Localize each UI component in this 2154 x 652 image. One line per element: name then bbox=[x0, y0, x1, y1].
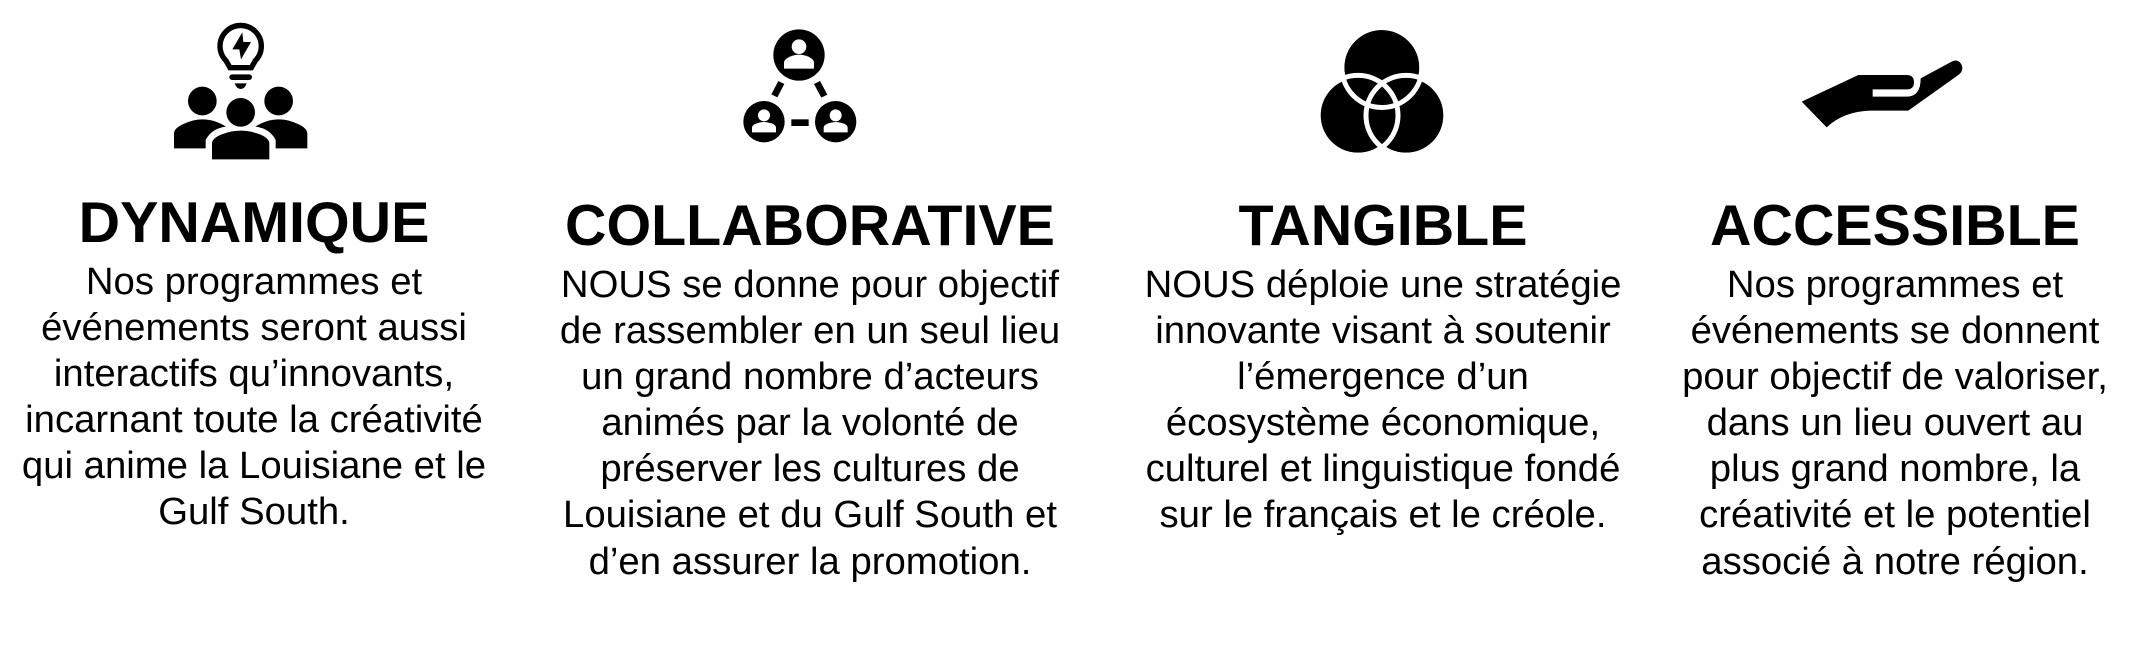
column: Accessible bbox=[1682, 194, 2108, 583]
text: Collaborative description: de rassembler en un seul lieu bbox=[560, 309, 1060, 352]
heading: Accessible: ACCESSIBLE bbox=[1710, 194, 2080, 258]
text: Dynamique description: qui anime la Louisiane et le bbox=[22, 444, 486, 487]
text: Collaborative description bbox=[560, 263, 1060, 583]
text: Dynamique description: événements seront aussi bbox=[41, 306, 467, 349]
text: Dynamique description: incarnant toute la créativité bbox=[25, 398, 483, 441]
text: Tangible description: culturel et linguistique fondé bbox=[1146, 447, 1620, 490]
text: Accessible description: dans un lieu ouvert au bbox=[1707, 401, 2083, 444]
text: Tangible description: NOUS déploie une stratégie bbox=[1145, 263, 1621, 306]
text: Collaborative description: d’en assurer la promotion. bbox=[589, 540, 1031, 583]
text: Tangible description: écosystème économique, bbox=[1166, 401, 1600, 444]
text: Tangible description: sur le français et le créole. bbox=[1160, 493, 1606, 536]
text: Accessible description: créativité et le potentiel bbox=[1699, 493, 2091, 536]
text: Collaborative description: NOUS se donne pour objectif bbox=[561, 263, 1059, 306]
column: Tangible bbox=[1145, 194, 1621, 536]
text: Dynamique description: Nos programmes et bbox=[86, 260, 422, 303]
text: Dynamique description: Gulf South. bbox=[158, 490, 350, 533]
text: Dynamique description bbox=[22, 260, 486, 533]
text: Collaborative description: Louisiane et du Gulf South et bbox=[563, 493, 1057, 536]
heading: Dynamique: DYNAMIQUE bbox=[79, 191, 429, 255]
text: Accessible description: pour objectif de valoriser, bbox=[1682, 355, 2108, 398]
icon: light bulb above three people bbox=[174, 25, 307, 159]
column: Dynamique bbox=[22, 191, 486, 533]
text: Collaborative description: préserver les cultures de bbox=[600, 447, 1020, 490]
text: Accessible description bbox=[1682, 263, 2108, 583]
text: Accessible description: événements se donnent bbox=[1691, 309, 2099, 352]
text: Accessible description: Nos programmes et bbox=[1727, 263, 2063, 306]
icon: open hand bbox=[1802, 61, 1962, 127]
text: Tangible description: innovante visant à soutenir bbox=[1155, 309, 1611, 352]
text: Tangible description: l’émergence d’un bbox=[1237, 355, 1529, 398]
text: Collaborative description: un grand nombre d’acteurs bbox=[581, 355, 1039, 398]
text: Collaborative description: animés par la volonté de bbox=[601, 401, 1019, 444]
column: Collaborative bbox=[560, 194, 1060, 583]
heading: Tangible: TANGIBLE bbox=[1238, 194, 1528, 258]
icon: venn diagram bbox=[1318, 27, 1446, 155]
heading: Collaborative: COLLABORATIVE bbox=[565, 194, 1055, 258]
icon: three connected people bbox=[743, 29, 856, 142]
text: Tangible description bbox=[1145, 263, 1621, 536]
text: Dynamique description: interactifs qu’innovants, bbox=[54, 352, 454, 395]
text: Accessible description: associé à notre région. bbox=[1701, 540, 2089, 583]
text: Accessible description: plus grand nombre, la bbox=[1710, 447, 2080, 490]
